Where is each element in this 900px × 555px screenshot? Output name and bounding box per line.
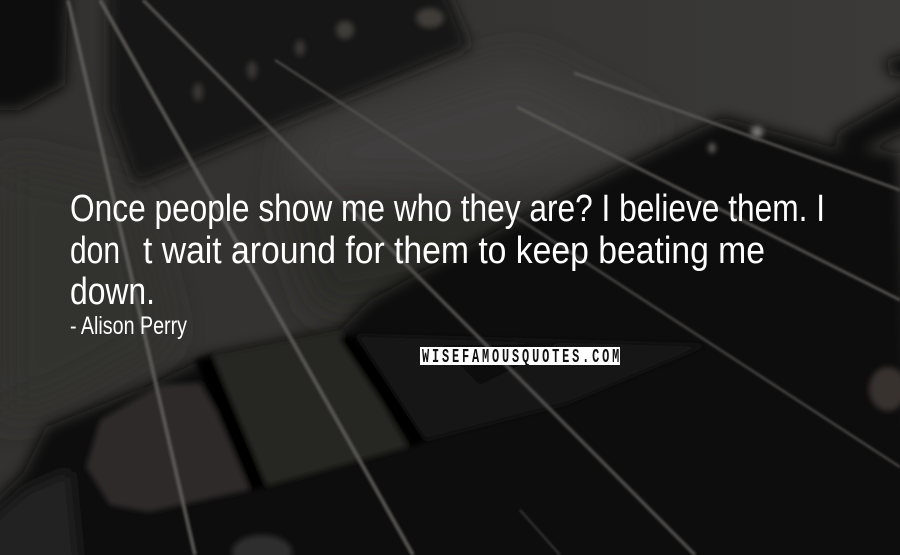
quote text bbox=[70, 188, 825, 313]
quote text: don bbox=[70, 230, 120, 272]
dark slot bbox=[195, 355, 267, 490]
second pickup block bbox=[356, 335, 706, 440]
lower dark body bbox=[0, 117, 900, 555]
pickup ring bbox=[86, 383, 262, 512]
author attribution: - Alison Perry bbox=[70, 312, 187, 340]
pickup block bbox=[207, 330, 408, 487]
fret dots bbox=[193, 83, 203, 101]
watermark: wisefamousquotes.com: WISEFAMOUSQUOTES.COM bbox=[422, 346, 622, 368]
quote text: down. bbox=[70, 271, 155, 313]
quote text: t wait around for them to keep beating me bbox=[143, 230, 765, 272]
knob shapes bbox=[232, 535, 292, 555]
dark corner and fretboard bbox=[0, 0, 68, 110]
